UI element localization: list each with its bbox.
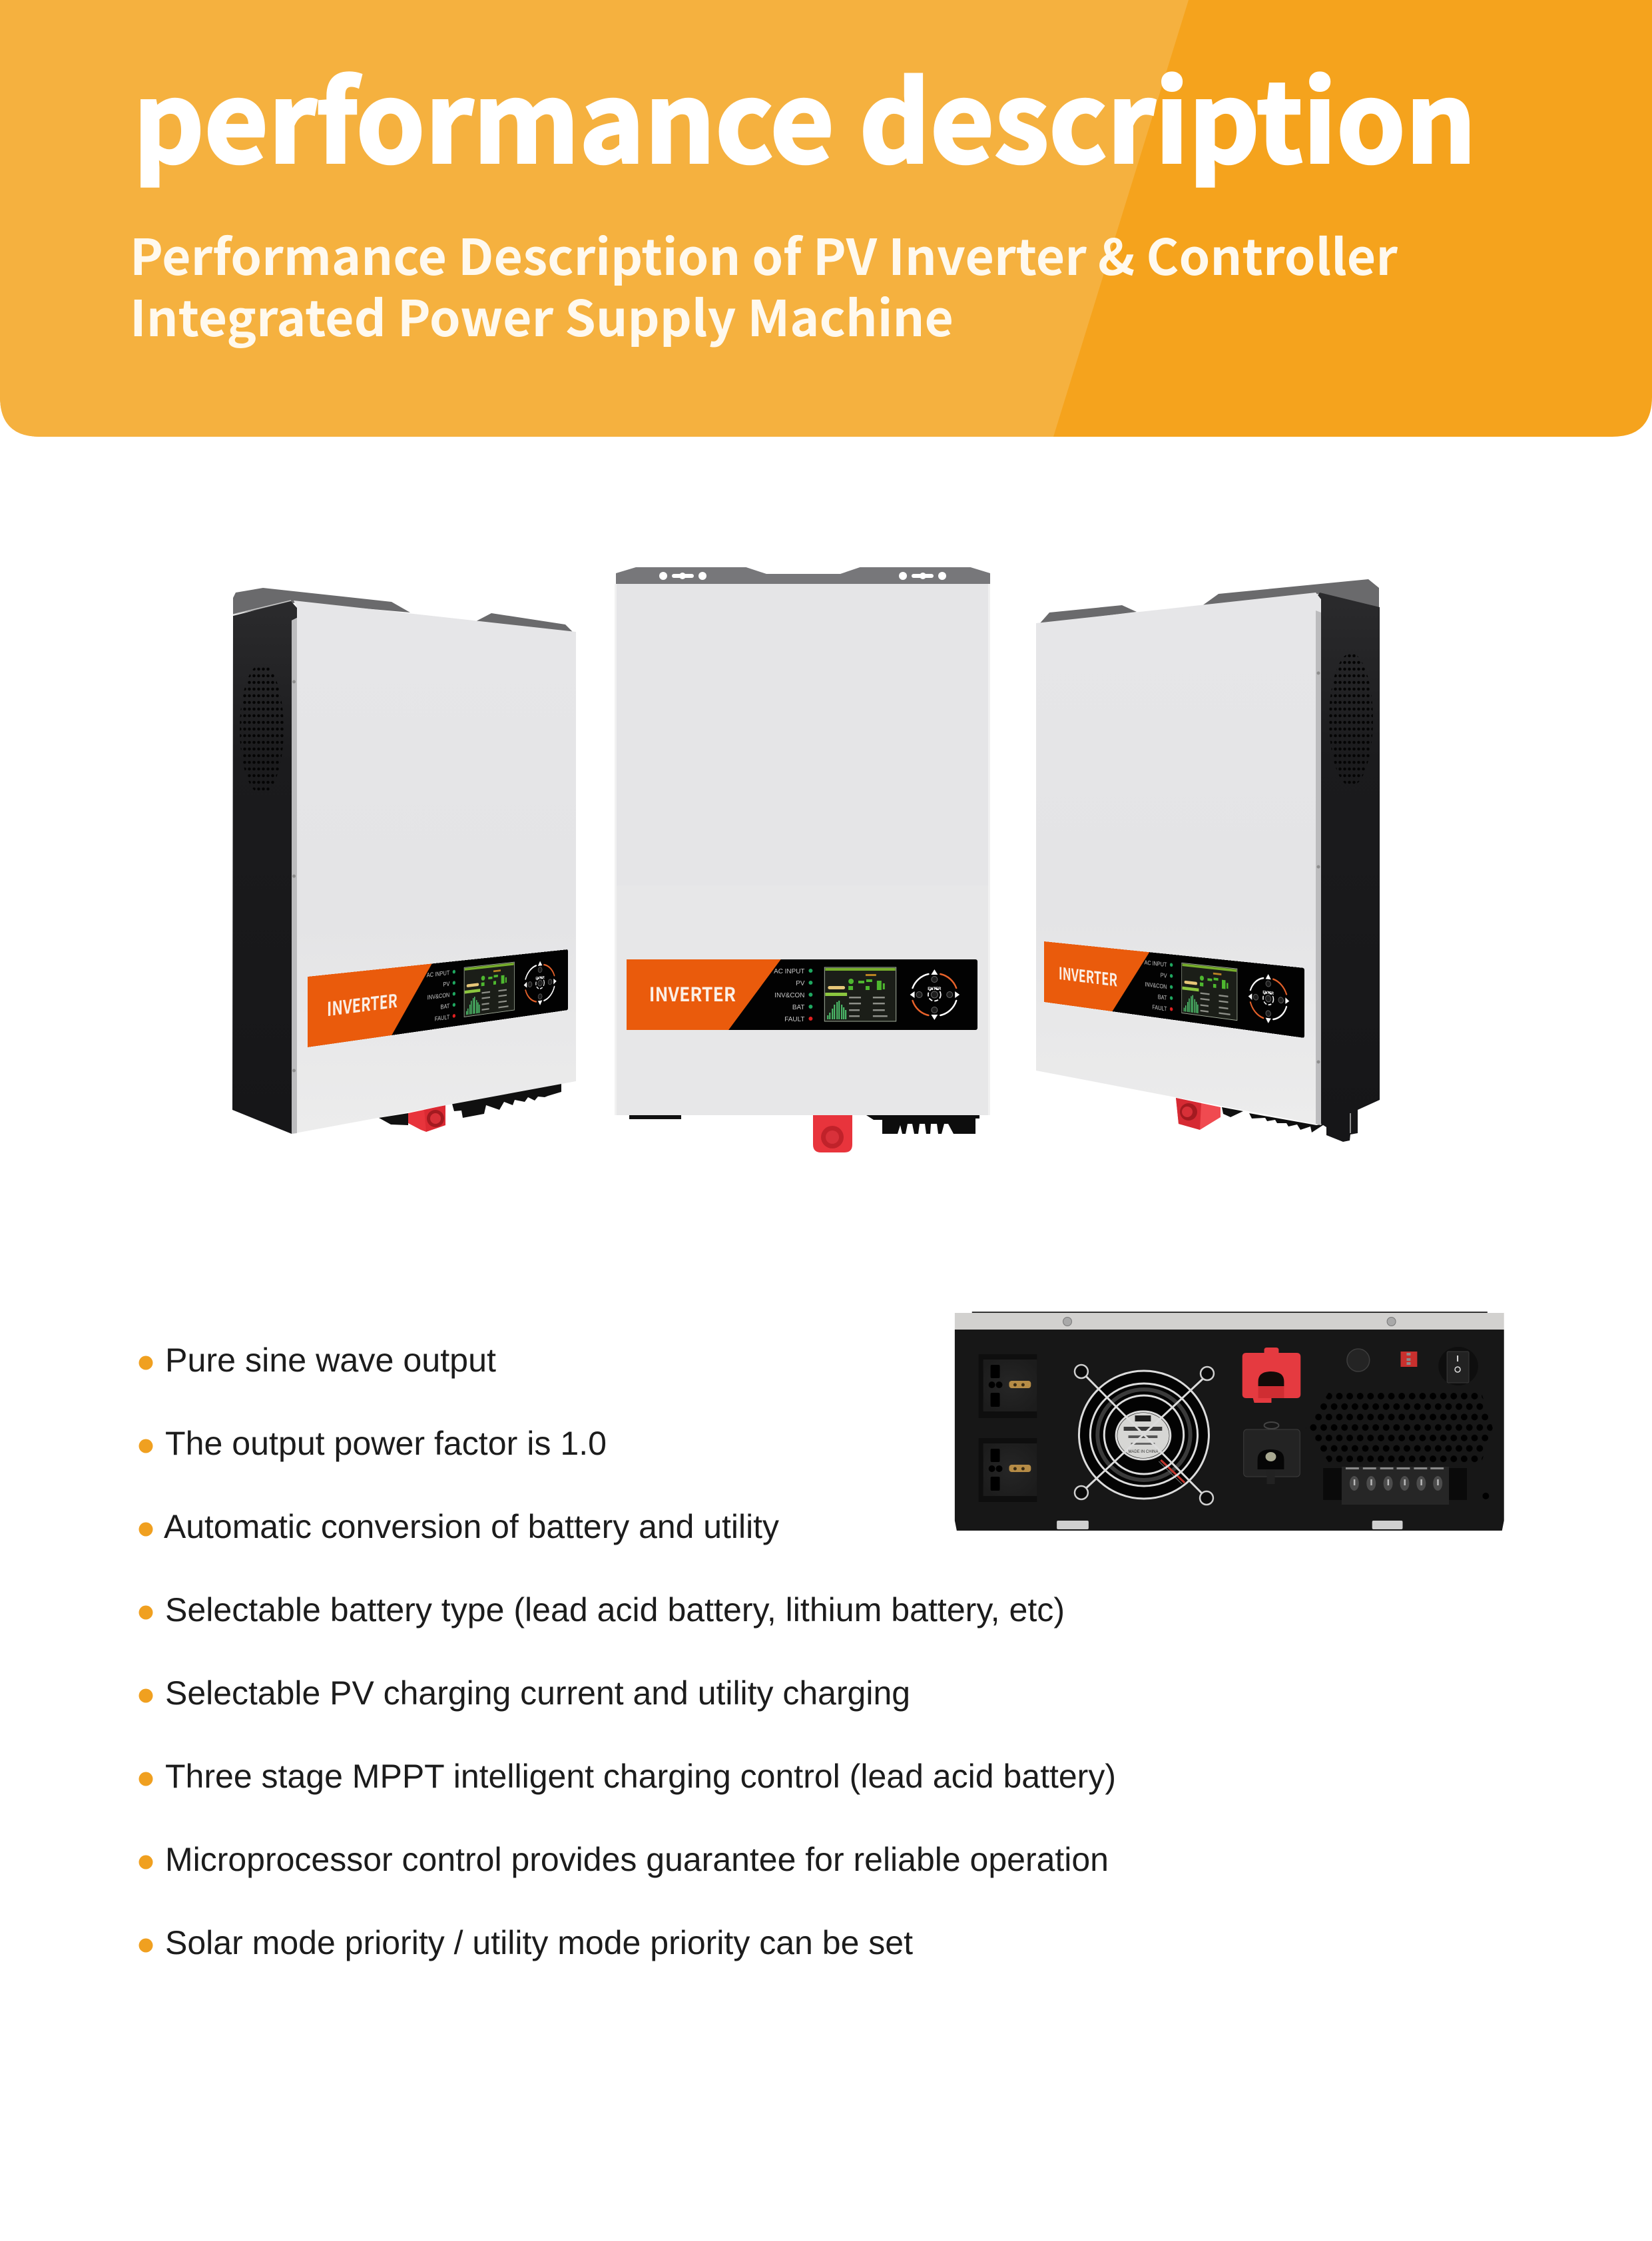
control panel: [308, 949, 568, 1047]
control panel: [1044, 941, 1304, 1038]
bullet 6: Three stage MPPT intelligent charging control (lead acid battery): [165, 1758, 1116, 1795]
control panel: PV: [1160, 971, 1167, 979]
control panel: AC INPUT: [456, 1039, 487, 1047]
dip switch: [1401, 1352, 1417, 1367]
control panel: AC INPUT: [774, 968, 804, 975]
bullet 1: Pure sine wave output: [165, 1342, 496, 1379]
product: right-angled inverter: [1036, 579, 1380, 1142]
control panel: FAULT: [784, 1016, 804, 1023]
socket top: [979, 1354, 1037, 1418]
red battery terminal: [1242, 1348, 1300, 1403]
terminal block: [1323, 1467, 1489, 1505]
control panel: INVERTER: [649, 979, 736, 1007]
subtitle: Integrated Power Supply Machine: [130, 280, 954, 351]
header banner: [0, 0, 1652, 437]
control panel: INVERTER: [1049, 941, 1071, 976]
vent grille: [1306, 1391, 1493, 1464]
red terminal: [408, 1105, 445, 1132]
side vent: [240, 664, 284, 794]
control panel: FAULT: [1083, 941, 1088, 950]
bullet 3: Automatic conversion of battery and utility: [164, 1508, 779, 1545]
bullet 7: Microprocessor control provides guarantee for reliable operation: [165, 1841, 1109, 1878]
control panel: PV: [443, 981, 449, 988]
subtitle: [130, 218, 1398, 351]
black battery terminal: [1244, 1422, 1300, 1484]
control panel: ENTER: [535, 976, 545, 981]
plug: [1347, 1349, 1370, 1371]
silver top strip: [955, 1313, 1504, 1330]
control panel: FAULT: [435, 1014, 449, 1023]
side vent: [1329, 653, 1373, 786]
socket bottom: [979, 1438, 1037, 1502]
control panel: INV&CON: [774, 992, 804, 999]
control panel: AC INPUT: [1144, 959, 1167, 969]
cooling fan: MADE IN CHINA: [1128, 1450, 1158, 1454]
control panel: BAT: [1157, 993, 1167, 1001]
product: left-angled inverter: [232, 588, 576, 1134]
red terminal: [1176, 1098, 1221, 1130]
control panel: INV&CON: [427, 991, 449, 1001]
control panel: ENTER: [1262, 990, 1274, 995]
connectors: [866, 1115, 979, 1134]
bullet 2: The output power factor is 1.0: [165, 1425, 607, 1462]
control panel: BAT: [792, 1004, 804, 1011]
control panel: [627, 959, 977, 1030]
cooling fan: [1075, 1365, 1214, 1505]
power switch: [1438, 1347, 1478, 1385]
red terminal: [813, 1115, 852, 1152]
product: rear panel: [955, 1312, 1504, 1531]
subtitle: Performance Description of PV Inverter & Controller: [130, 218, 1398, 290]
feature list: [138, 1342, 1116, 1961]
mounting holes: [659, 572, 946, 580]
control panel: INVERTER: [330, 1005, 417, 1047]
bullet 8: Solar mode priority / utility mode priority can be set: [165, 1924, 913, 1961]
control panel: INV&CON: [1145, 981, 1167, 991]
bullet 5: Selectable PV charging current and utility charging: [165, 1674, 910, 1712]
control panel: ENTER: [928, 987, 942, 991]
product: front-view inverter: [615, 567, 990, 1152]
control panel: BAT: [441, 1003, 449, 1011]
control panel: PV: [796, 980, 805, 987]
title: performance description: [133, 34, 1476, 194]
connectors: [452, 1083, 561, 1118]
bullet 4: Selectable battery type (lead acid battery, lithium battery, etc): [165, 1591, 1065, 1628]
connectors: [1249, 1113, 1325, 1132]
